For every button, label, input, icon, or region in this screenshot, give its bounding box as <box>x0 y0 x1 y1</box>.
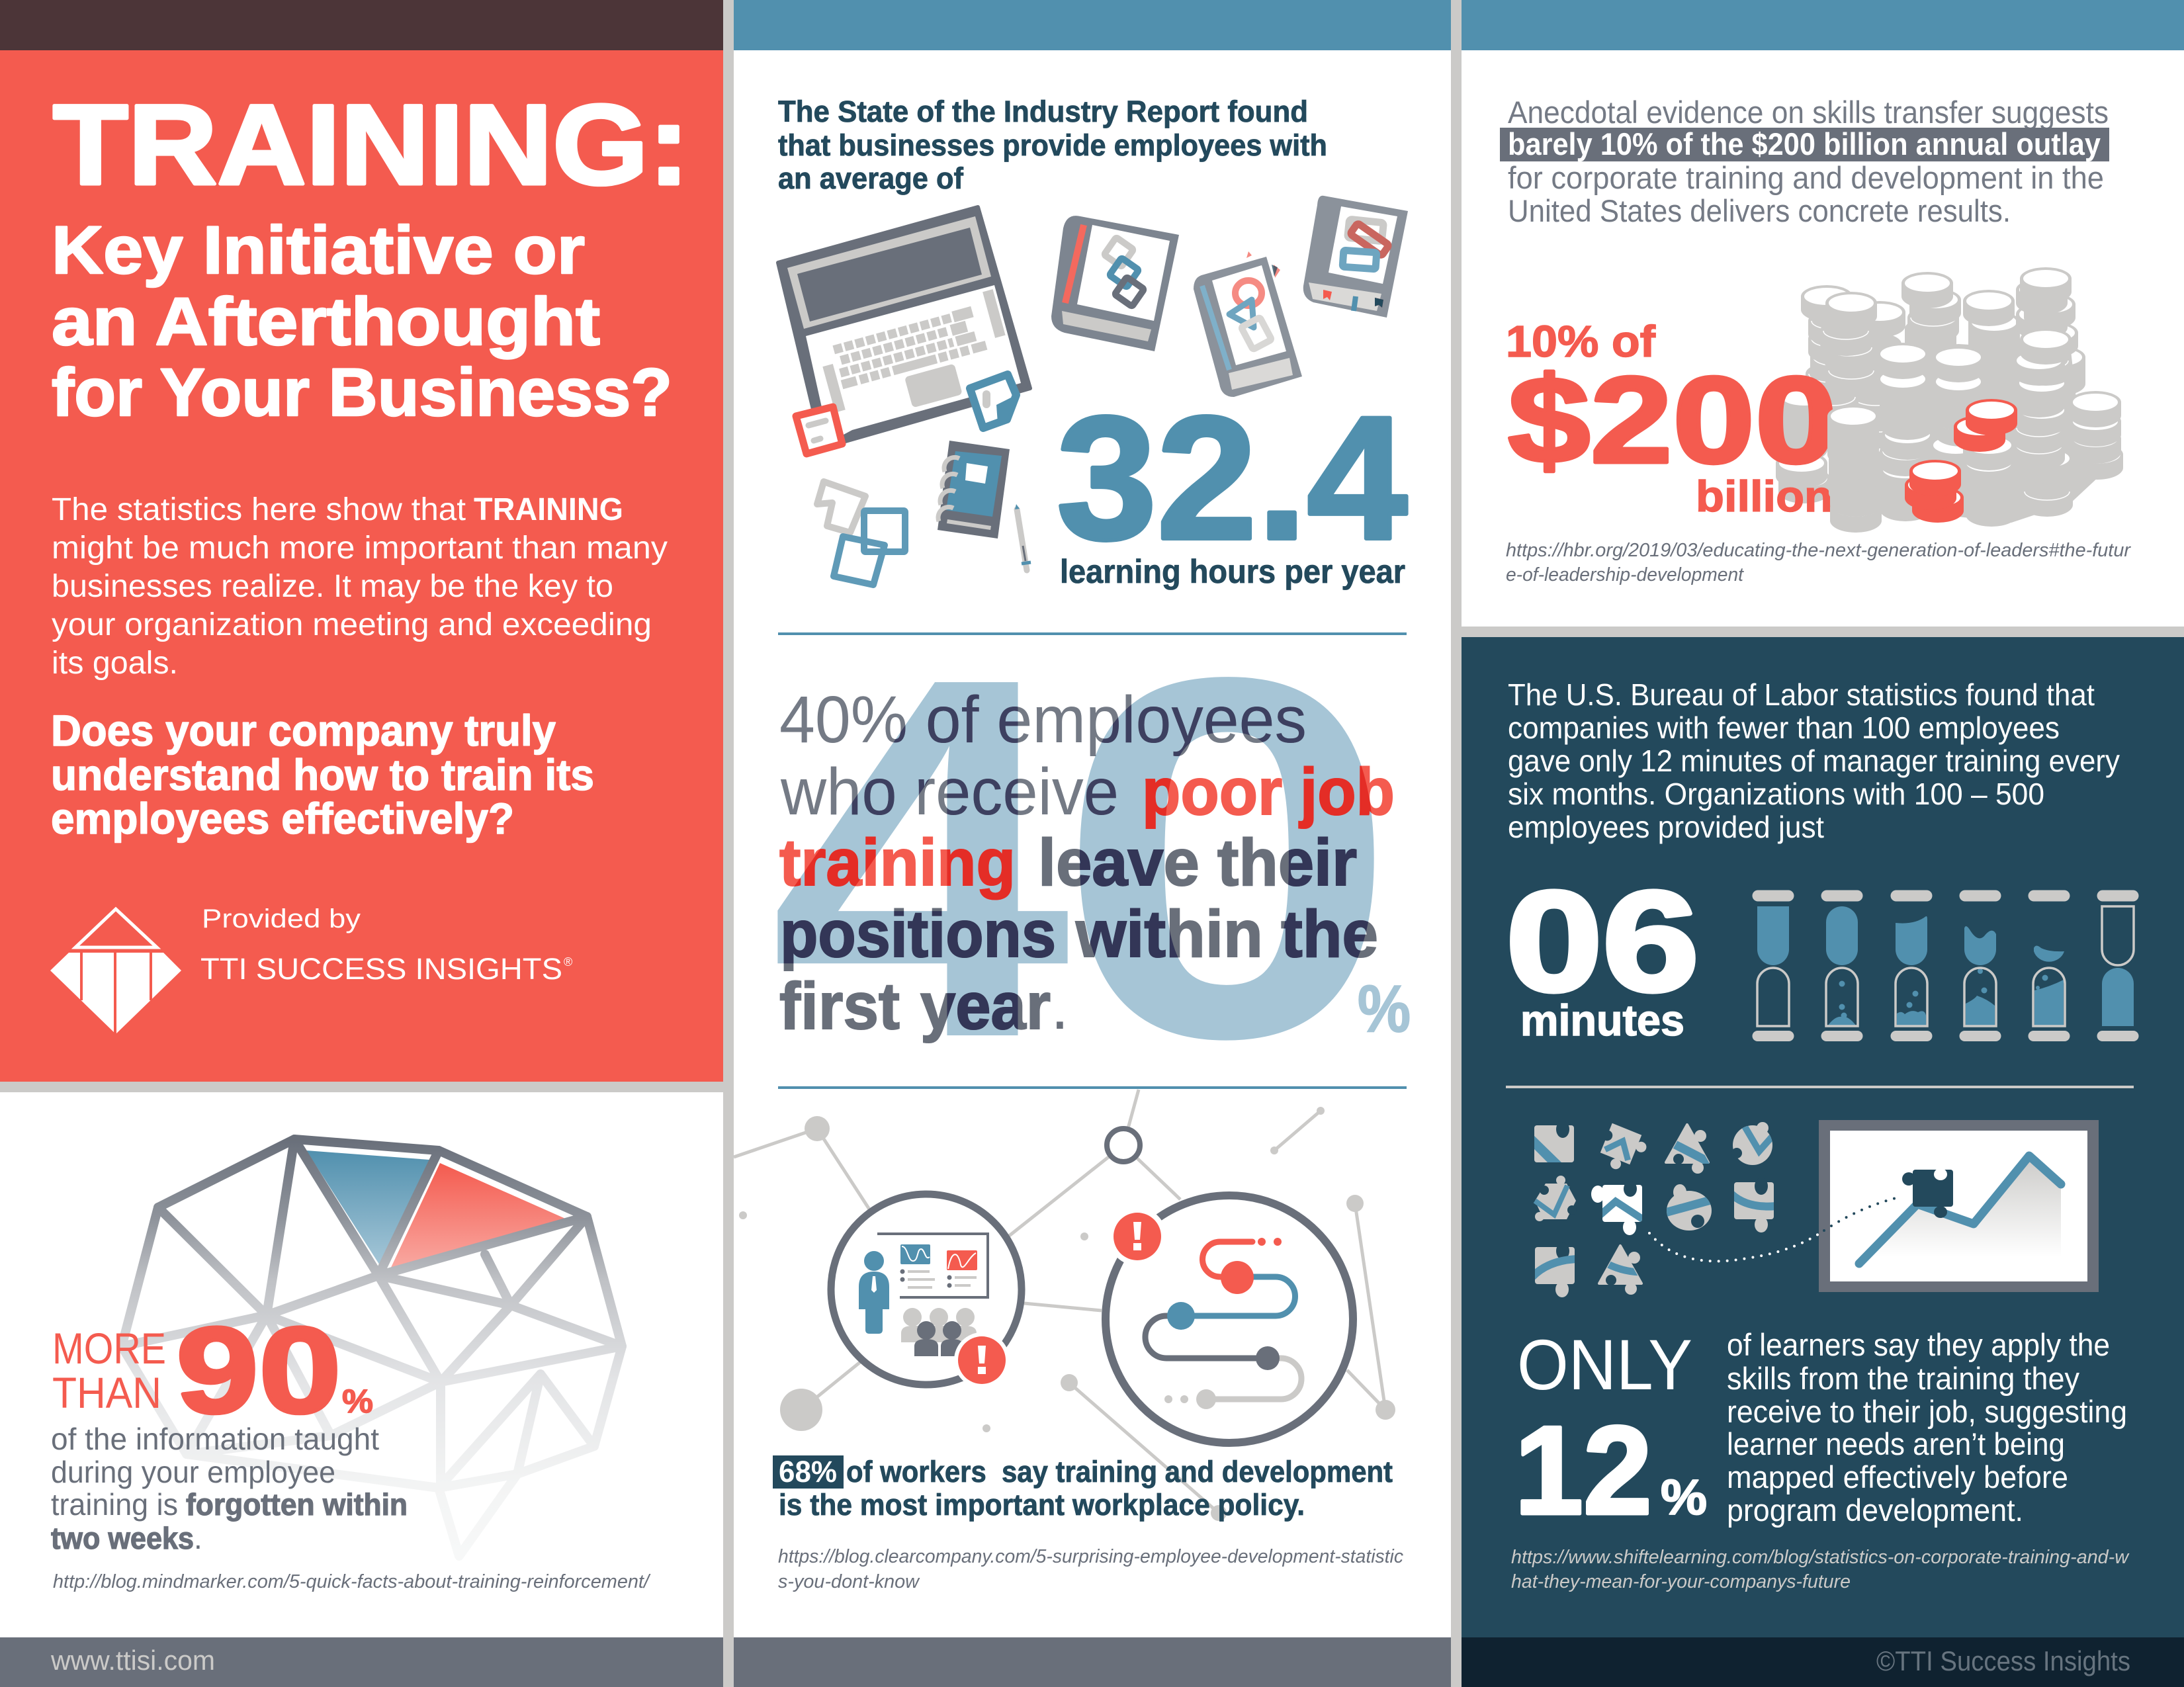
source link: http://blog.mindmarker.com/5-quick-facts-about-training-reinforcement/ <box>53 1571 651 1592</box>
statement overlap darkening <box>783 695 1372 1030</box>
hourglass 4 <box>1960 890 2001 1041</box>
anecdotal evidence text: United States delivers concrete results. <box>1508 193 2011 228</box>
learners paragraph: receive to their job, suggesting <box>1727 1394 2127 1429</box>
statement overlap darkening: who receive <box>780 755 1119 829</box>
hourglass 2 <box>1821 890 1863 1041</box>
statement: 40 percent of employees: . <box>1051 969 1069 1043</box>
footer: website <box>0 1637 723 1687</box>
12 percent: 12 <box>1514 1401 1652 1541</box>
brand name: TTI SUCCESS INSIGHTS <box>200 952 562 986</box>
90 percent <box>176 1303 373 1439</box>
hourglass 5 <box>2029 890 2070 1041</box>
learners paragraph: of learners say they apply the <box>1727 1327 2110 1362</box>
subtitle: for Your Business? <box>52 355 672 430</box>
footer: website: www.ttisi.com <box>50 1645 215 1676</box>
icon: laptop <box>778 207 1030 448</box>
source link <box>778 1546 1403 1592</box>
panel: middle column <box>734 0 1451 1687</box>
forgotten text: training is <box>51 1487 178 1522</box>
icon: TTI logo <box>50 909 181 1034</box>
anecdotal evidence text <box>1500 95 2109 228</box>
bureau of labor text: The U.S. Bureau of Labor statistics found that <box>1508 677 2095 712</box>
statement overlap darkening: leave their <box>1038 826 1357 900</box>
10% of: 10% of <box>1506 317 1656 367</box>
icon: alert badge two <box>1108 1207 1166 1266</box>
icon: book with red spine <box>1051 216 1179 351</box>
anecdotal evidence text: Anecdotal evidence on skills transfer suggests <box>1508 95 2109 130</box>
intro paragraph <box>52 492 668 681</box>
panel: forgotten statistic <box>0 1092 723 1637</box>
90 percent: % <box>342 1383 373 1420</box>
statement overlap darkening: poor job <box>1142 755 1395 829</box>
intro paragraph: its goals. <box>52 646 178 681</box>
monitor chart <box>1819 1120 2099 1292</box>
bureau of labor text: companies with fewer than 100 employees <box>1508 711 2060 745</box>
source link: https://blog.clearcompany.com/5-surprising-employee-development-statistic <box>778 1546 1403 1567</box>
forgotten text: during your employee <box>51 1455 335 1489</box>
coin pile front <box>1827 328 2123 533</box>
intro paragraph: The statistics here show that <box>52 492 466 527</box>
dotted connector <box>1649 1197 1898 1261</box>
statement overlap darkening: training <box>779 826 1016 900</box>
statement overlap darkening: year <box>920 969 1051 1043</box>
puzzle pieces <box>1532 1121 1776 1297</box>
source link: e-of-leadership-development <box>1506 564 1745 585</box>
statement: 40 percent of employees: positions <box>780 897 1056 971</box>
source link: s-you-dont-know <box>778 1571 920 1592</box>
source link: hat-they-mean-for-your-companys-future <box>1511 1571 1851 1592</box>
more than label: MORE <box>52 1324 166 1373</box>
source link <box>1506 540 2131 585</box>
question <box>51 706 594 843</box>
big background number: 40 <box>769 572 1411 1145</box>
learners paragraph: skills from the training they <box>1727 1361 2079 1396</box>
footer: copyright: ©TTI Success Insights <box>1876 1645 2130 1676</box>
learners paragraph: learner needs aren’t being <box>1727 1426 2065 1461</box>
bureau of labor text: six months. Organizations with 100 – 500 <box>1508 777 2044 811</box>
subtitle: an Afterthought <box>52 284 600 359</box>
icon: grey book <box>1303 196 1408 318</box>
intro paragraph: your organization meeting and exceeding <box>52 607 652 642</box>
statement: 40 percent of employees: leave their <box>1038 826 1357 900</box>
statement: 40 percent of employees: who receive <box>780 755 1119 829</box>
forgotten text: two weeks <box>51 1521 194 1555</box>
coin pile back <box>1801 267 2085 449</box>
source link: https://www.shiftelearning.com/blog/statistics-on-corporate-training-and-w <box>1511 1547 2130 1568</box>
icon: pencil <box>1015 504 1031 570</box>
only label: ONLY <box>1517 1324 1692 1405</box>
hourglass 1 <box>1752 890 1794 1041</box>
90 percent: 90 <box>176 1303 341 1439</box>
statement: 68 percent of workers <box>773 1455 1393 1522</box>
network connector lines and nodes <box>734 1090 1395 1521</box>
more than label <box>52 1324 166 1417</box>
heading: state of the industry: an average of <box>778 161 964 195</box>
forgotten text: forgotten within <box>186 1487 408 1522</box>
icon: blue note <box>970 374 1016 428</box>
hourglass sequence <box>1752 890 2138 1041</box>
statement: 68 percent of workers: of workers say training and development <box>846 1455 1393 1489</box>
source link: https://hbr.org/2019/03/educating-the-next-generation-of-leaders#the-futur <box>1506 540 2131 561</box>
big background number: 40: 0 <box>1055 572 1399 1145</box>
anecdotal evidence text: for corporate training and development in the <box>1508 160 2104 195</box>
heading: state of the industry: The State of the Industry Report found <box>778 95 1308 128</box>
question: Does your company truly <box>51 706 556 755</box>
panel: right top <box>1462 0 2184 627</box>
statement overlap darkening: positions <box>780 897 1056 971</box>
intro paragraph: TRAINING <box>474 492 623 527</box>
learners paragraph <box>1727 1327 2127 1528</box>
brain network icon <box>122 1139 622 1556</box>
learners paragraph: mapped effectively before <box>1727 1459 2068 1494</box>
coin pile left, behind $200 <box>1776 386 1830 503</box>
panel: intro <box>0 0 723 1082</box>
icon: training presentation circle <box>831 1194 1022 1385</box>
icon: alert badge one <box>954 1332 1010 1388</box>
heading: state of the industry: that businesses provide employees with <box>778 128 1327 162</box>
panel: right dark <box>1462 637 2184 1637</box>
big number: 32.4: 32.4 <box>1057 380 1409 576</box>
statement: 40 percent of employees: 40% of employees <box>779 683 1307 757</box>
red coins <box>1905 399 2017 523</box>
question: understand how to train its <box>51 750 594 799</box>
caption: learning hours: learning hours per year <box>1060 553 1405 590</box>
icon: red note <box>796 407 842 454</box>
statement: 40 percent of employees: poor job <box>1142 755 1395 829</box>
billion: billion <box>1696 472 1833 521</box>
statement overlap darkening: first <box>779 969 900 1043</box>
question: employees effectively? <box>51 794 514 843</box>
big background number: 40: 4 <box>769 572 1074 1145</box>
intro paragraph: businesses realize. It may be the key to <box>52 569 613 604</box>
statement overlap darkening: within the <box>1075 897 1378 971</box>
heading: state of the industry <box>778 95 1327 195</box>
brand name: ® <box>564 955 572 969</box>
hourglass 3 <box>1891 890 1932 1041</box>
anecdotal evidence text: barely 10% of the $200 billion annual outlay <box>1508 126 2101 161</box>
bureau of labor text: employees provided just <box>1508 810 1824 844</box>
more than label: THAN <box>52 1368 161 1417</box>
icon: blue notebook <box>938 441 1010 539</box>
forgotten text: . <box>194 1521 202 1555</box>
hourglass 6 <box>2097 890 2138 1041</box>
$200: $200 <box>1508 352 1837 489</box>
statement: 40 percent of employees: year <box>920 969 1051 1043</box>
subtitle <box>52 212 672 430</box>
learners paragraph: program development. <box>1727 1492 2023 1528</box>
icon: loose papers <box>817 482 905 585</box>
statement overlap darkening: 40% of employees <box>779 683 1307 757</box>
subtitle: Key Initiative or <box>52 212 585 288</box>
statement: 40 percent of employees: training <box>779 826 1016 900</box>
forgotten text: of the information taught <box>51 1422 379 1456</box>
statement: 40 percent of employees: first <box>779 969 900 1043</box>
footer: copyright <box>1462 1637 2184 1687</box>
bureau of labor text <box>1508 677 2120 844</box>
source link <box>1511 1547 2130 1592</box>
intro paragraph: might be much more important than many <box>52 531 668 566</box>
statement: 68 percent of workers: 68% <box>779 1455 837 1489</box>
12 percent: % <box>1661 1469 1707 1525</box>
big background number: 40: % <box>1358 972 1411 1046</box>
06 number: 06 <box>1506 861 1699 1021</box>
forgotten text <box>51 1422 408 1555</box>
statement: 68 percent of workers: is the most important workplace policy. <box>779 1488 1305 1522</box>
minutes label: minutes <box>1520 996 1684 1045</box>
icon: book with blue spine <box>1194 251 1302 397</box>
bureau of labor text: gave only 12 minutes of manager training every <box>1508 744 2120 778</box>
statement: 40 percent of employees <box>779 683 1395 1043</box>
icon: process path circle <box>1106 1195 1353 1443</box>
title: TRAINING: <box>53 81 689 208</box>
provided by: Provided by <box>202 904 361 933</box>
statement: 40 percent of employees: within the <box>1075 897 1378 971</box>
